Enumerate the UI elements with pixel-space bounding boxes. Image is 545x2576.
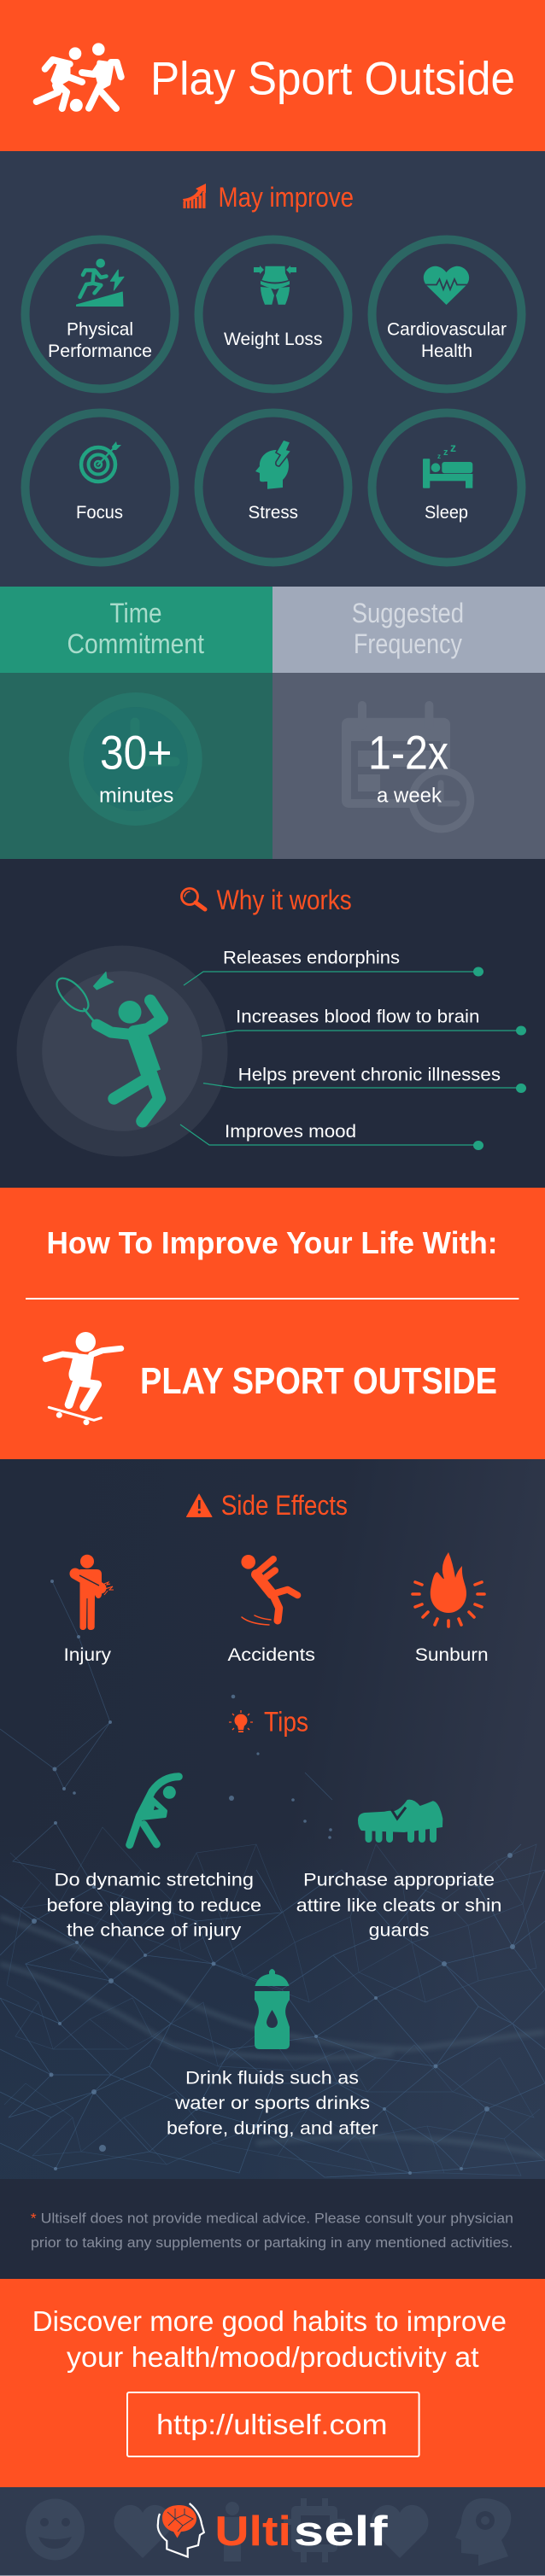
label xyxy=(48,319,152,361)
icon: person stretching xyxy=(130,1777,179,1845)
icon: faint calendar with clock xyxy=(342,705,471,829)
heading: time commitment xyxy=(67,598,204,659)
panel: may improve xyxy=(0,151,545,587)
callout: increases blood flow: Increases blood flow to brain xyxy=(236,1006,480,1026)
panel: side effects and tips xyxy=(0,1459,545,2279)
callout: helps prevent chronic illnesses xyxy=(203,1064,526,1093)
tip: dynamic stretching: the chance of injury xyxy=(67,1920,242,1941)
icon: person holding injured arm xyxy=(75,1555,114,1630)
label: Physical xyxy=(67,319,133,340)
label: Sleep xyxy=(425,502,468,523)
stat: 1-2x a week xyxy=(368,725,448,807)
label: Focus xyxy=(76,502,123,523)
panel: time commitment xyxy=(0,587,272,859)
label: Health xyxy=(421,341,472,361)
faint footer icons xyxy=(26,2498,511,2566)
logo icon: brain in head xyxy=(158,2503,204,2556)
tip: appropriate attire: attire like cleats or shin xyxy=(296,1895,502,1915)
button: url: http://ultiself.com xyxy=(156,2409,388,2440)
stat: 30+ minutes: 30+ xyxy=(100,725,172,779)
benefit: sleep xyxy=(372,413,521,562)
icon: bed with zzz: z xyxy=(437,453,441,460)
callout: releases endorphins: Releases endorphins xyxy=(223,948,400,968)
tip: dynamic stretching: Do dynamic stretching xyxy=(55,1870,254,1890)
tip: drink fluids: water or sports drinks xyxy=(174,2093,370,2113)
panel: how to improve banner xyxy=(0,1188,545,1459)
callout: releases endorphins xyxy=(184,948,483,985)
icon: sports bottle xyxy=(255,1969,290,2049)
label: Performance xyxy=(48,341,152,361)
background network texture xyxy=(0,1580,545,2179)
tip: dynamic stretching: before playing to reduce xyxy=(46,1895,261,1915)
callout: helps prevent chronic illnesses: Helps prevent chronic illnesses xyxy=(238,1064,501,1084)
callout: improves mood: Improves mood xyxy=(225,1121,356,1142)
icon: cleat xyxy=(358,1800,442,1843)
stat: 1-2x a week: 1-2x xyxy=(368,725,448,779)
icon: target xyxy=(81,441,121,482)
heading: why it works: Why it works xyxy=(217,885,352,915)
icon: rising bar chart xyxy=(183,184,206,208)
side effect: injury: Injury xyxy=(63,1644,111,1665)
panel: footer logo xyxy=(0,2487,545,2576)
heading: tips xyxy=(229,1707,308,1738)
text: discover more: your health/mood/productivity at xyxy=(67,2341,479,2373)
tip: drink fluids: before, during, and after xyxy=(167,2117,378,2138)
side effect: sunburn xyxy=(413,1552,489,1665)
stat: 1-2x a week: a week xyxy=(377,784,442,807)
icon: head with lightning xyxy=(255,440,291,489)
heading: time commitment: Commitment xyxy=(67,628,204,659)
disclaimer: * Ultiself does not provide medical advice. Please consult your physician xyxy=(31,2210,513,2226)
disclaimer xyxy=(0,2179,545,2279)
side effect: accidents xyxy=(227,1555,315,1665)
icon: sun flame xyxy=(413,1552,484,1627)
panel: suggested frequency xyxy=(272,587,545,859)
benefit: stress xyxy=(198,413,349,562)
tip: dynamic stretching xyxy=(46,1777,261,1941)
benefit: weight loss xyxy=(198,239,349,389)
icon: warning triangle xyxy=(186,1494,212,1516)
label xyxy=(387,319,507,361)
icon: waist with arrows xyxy=(254,266,296,305)
side effect: accidents: Accidents xyxy=(227,1644,315,1665)
icon: runner on ramp xyxy=(77,259,124,306)
icon: bed with zzz: z xyxy=(443,447,448,458)
button: url xyxy=(127,2392,419,2456)
benefit: focus xyxy=(26,413,174,562)
icon: bed with zzz xyxy=(423,441,472,488)
tip: appropriate attire xyxy=(296,1800,502,1941)
icon: bed with zzz: z xyxy=(450,441,456,454)
icon: heart with pulse xyxy=(424,266,469,305)
label: Cardiovascular xyxy=(387,319,507,340)
heading: may improve: May improve xyxy=(219,182,354,213)
benefit: physical performance xyxy=(26,239,174,389)
callout: increases blood flow xyxy=(202,1006,526,1037)
text: discover more: Discover more good habits to improve xyxy=(32,2305,507,2337)
icon: light bulb xyxy=(229,1710,253,1732)
icon: magnifier xyxy=(181,888,205,909)
tip: drink fluids xyxy=(167,1969,378,2138)
heading: side effects: Side Effects xyxy=(221,1490,348,1521)
heading: suggested frequency: Suggested xyxy=(352,598,464,628)
panel: why it works xyxy=(0,859,545,1188)
icon: person slipping xyxy=(241,1555,297,1625)
label: Weight Loss xyxy=(224,329,323,349)
icon: two soccer players xyxy=(37,43,121,112)
heading: time commitment: Time xyxy=(109,598,162,628)
heading: suggested frequency: Frequency xyxy=(354,628,462,659)
panel: title header xyxy=(0,0,545,151)
benefit: cardiovascular health xyxy=(372,239,521,389)
callout: improves mood xyxy=(180,1121,483,1150)
icon: skateboarder xyxy=(45,1332,121,1425)
tip: appropriate attire: Purchase appropriate xyxy=(303,1870,495,1890)
heading: tips: Tips xyxy=(264,1707,308,1738)
tip: appropriate attire: guards xyxy=(369,1920,429,1941)
tip: drink fluids: Drink fluids such as xyxy=(185,2067,359,2088)
panel: call to action xyxy=(0,2279,545,2487)
heading: how to improve your life with: How To Improve Your Life With: xyxy=(46,1225,497,1260)
heading: play sport outside: PLAY SPORT OUTSIDE xyxy=(140,1360,497,1402)
logo: Ultiself: Ulti xyxy=(214,2509,291,2555)
logo: Ultiself: self xyxy=(294,2509,388,2555)
disclaimer: prior to taking any supplements or partaking in any mentioned activities. xyxy=(31,2234,513,2251)
stat: 30+ minutes xyxy=(99,725,173,807)
logo: Ultiself xyxy=(158,2503,388,2556)
stat: 30+ minutes: minutes xyxy=(99,784,173,807)
title text: Play Sport Outside xyxy=(150,52,515,105)
side effect: injury xyxy=(63,1555,114,1665)
heading: suggested frequency xyxy=(352,598,464,659)
illustration: badminton player xyxy=(17,946,227,1156)
icon: faint clock xyxy=(76,700,195,818)
label: Stress xyxy=(248,502,298,523)
side effect: sunburn: Sunburn xyxy=(415,1644,489,1665)
text: discover more xyxy=(32,2305,507,2373)
